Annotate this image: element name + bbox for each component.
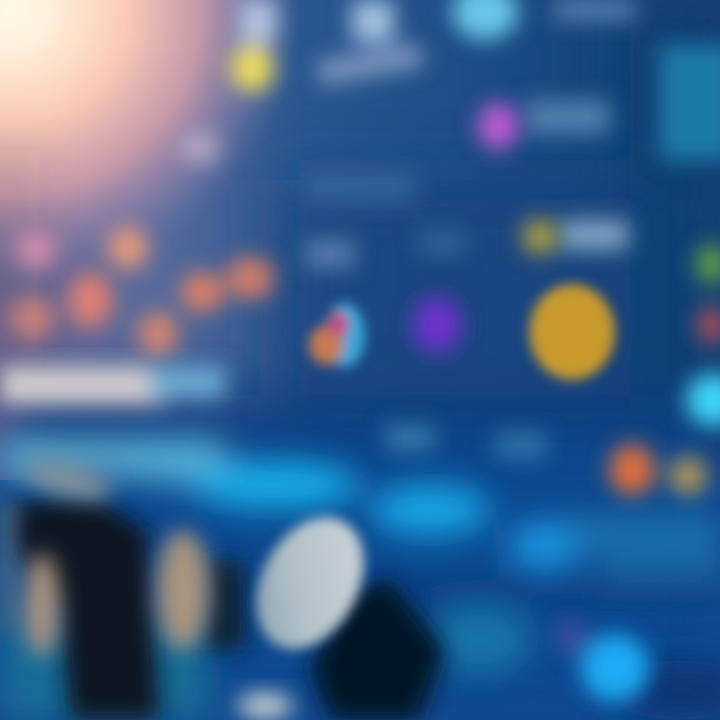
- coloured dots: [413, 102, 720, 496]
- light horizontal bar: [0, 366, 225, 404]
- fingers: [24, 530, 210, 657]
- dashboard labels, centre: [305, 100, 628, 458]
- top row dashboard tiles: [230, 0, 720, 160]
- glowing blue spot, lower right: [556, 622, 649, 702]
- bright cyan tile, right: [686, 374, 720, 426]
- cuff highlight, left: [0, 452, 116, 630]
- hands and cuffs, foreground: [0, 452, 445, 720]
- small pale spot, bottom edge: [237, 692, 293, 720]
- dark sleeve, left: [10, 495, 245, 720]
- large gold coin: [529, 284, 615, 380]
- glowing cyan waves: [0, 438, 720, 720]
- chart markers, left: [10, 132, 274, 356]
- dark sleeve, right: [310, 578, 445, 720]
- pale oval cuff: [235, 499, 385, 667]
- multicolour pie: [309, 303, 365, 367]
